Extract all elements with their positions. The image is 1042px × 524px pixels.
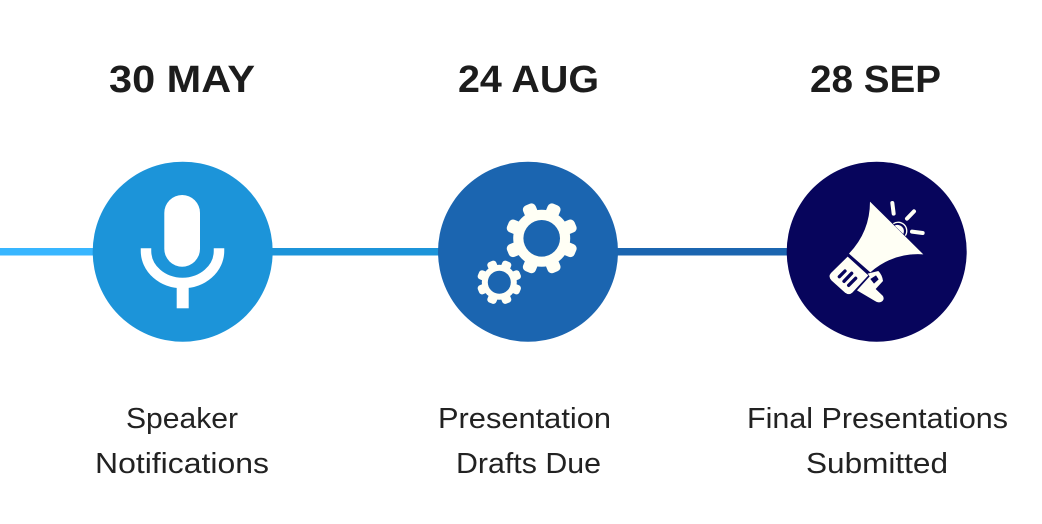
milestone 3: 28 Sep bbox=[747, 59, 1008, 480]
description: Final Presentations Submitted: Submitted bbox=[806, 448, 948, 480]
icon badge: megaphone bbox=[787, 162, 967, 342]
description: Presentation Drafts Due: Drafts Due bbox=[456, 448, 601, 480]
milestone 2: 24 Aug bbox=[438, 59, 618, 480]
date heading: 30 MAY: 30 MAY bbox=[109, 59, 255, 101]
description: Presentation Drafts Due bbox=[438, 403, 611, 480]
timeline connector: segment 3 bbox=[610, 248, 795, 256]
description: Speaker Notifications: Notifications bbox=[95, 448, 269, 480]
milestone 1: 30 May bbox=[93, 59, 273, 480]
timeline connector: segment 2 bbox=[265, 248, 445, 256]
description: Speaker Notifications: Speaker bbox=[126, 403, 238, 435]
description: Final Presentations Submitted bbox=[747, 403, 1008, 480]
date heading: 28 SEP: 28 SEP bbox=[810, 59, 941, 101]
description: Final Presentations Submitted: Final Presentations bbox=[747, 403, 1008, 435]
icon badge: microphone bbox=[93, 162, 273, 342]
icon badge: gears bbox=[438, 162, 618, 342]
description: Speaker Notifications bbox=[95, 403, 269, 480]
timeline connector: segment 1 bbox=[0, 248, 100, 256]
date heading: 24 AUG: 24 AUG bbox=[458, 59, 599, 101]
description: Presentation Drafts Due: Presentation bbox=[438, 403, 611, 435]
